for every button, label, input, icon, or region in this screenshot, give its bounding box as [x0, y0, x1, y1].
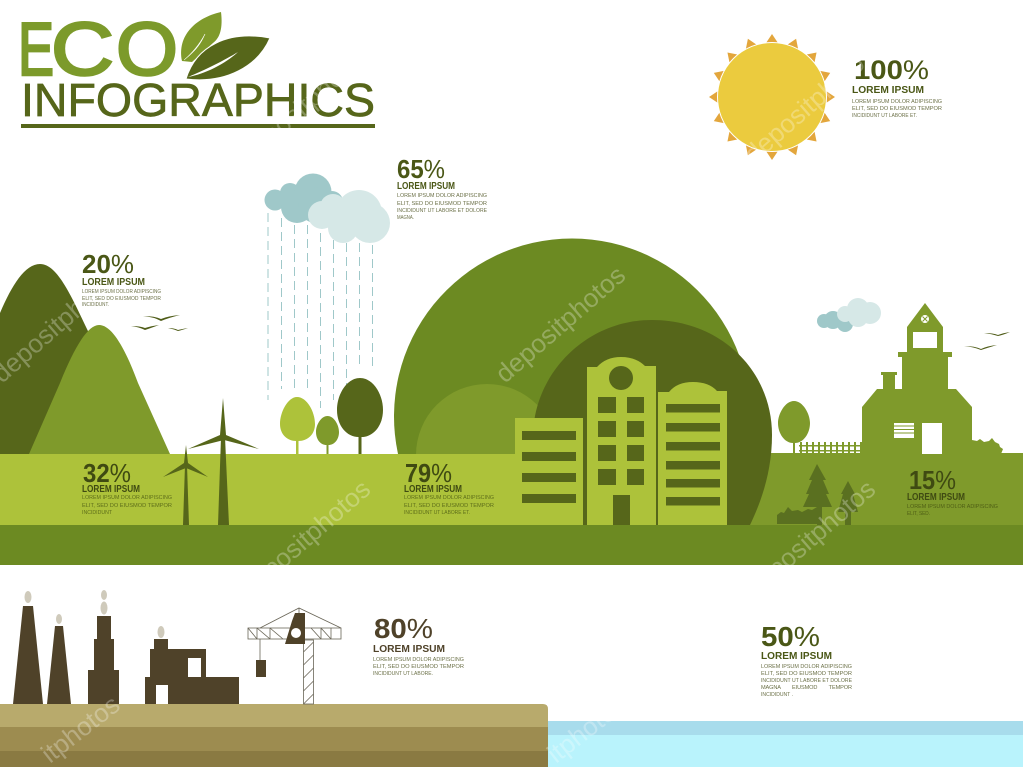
text block: 80%: LOREM IPSUM DOLOR ADIPISCING [373, 657, 464, 663]
text block: 15%: ELIT, SED. [907, 511, 930, 517]
text block: 32%: INCIDIDUNT [82, 510, 113, 516]
text block: 20% [82, 249, 161, 308]
icon: birds right [964, 332, 1010, 350]
icon: bush by house [972, 438, 1003, 454]
icon: small cloud dark [817, 311, 853, 332]
text block: 80%: LOREM IPSUM [373, 643, 445, 655]
icon: factory chimneys [13, 590, 164, 704]
text block: 100% [852, 55, 942, 119]
text block: 50%: LOREM IPSUM DOLOR ADIPISCING [761, 664, 852, 670]
heading: ECO: O [116, 7, 178, 91]
text block: 100%: 100% [854, 55, 929, 85]
icon: right office building [658, 382, 727, 525]
ground: light green band [0, 454, 775, 525]
watermarks: depositphotos [739, 474, 881, 603]
text block: 79%: ELIT, SED DO EIUSMOD TEMPOR [404, 503, 494, 509]
mast [248, 608, 341, 704]
soil layers [0, 704, 548, 767]
title: Eco Infographics [18, 7, 375, 128]
icon: trees in rain [280, 378, 383, 454]
title underline [21, 124, 375, 128]
watermarks: depositphotos [234, 474, 376, 603]
text block: 100%: LOREM IPSUM DOLOR ADIPISCING [852, 99, 942, 105]
text block: 65% [397, 154, 487, 221]
icon: light rain cloud [308, 190, 390, 243]
text block: 100%: LOREM IPSUM [852, 84, 924, 96]
water [540, 721, 1023, 767]
small round hill [416, 384, 558, 455]
icon: house [862, 303, 972, 454]
text block: 79%: LOREM IPSUM [404, 483, 462, 495]
watermarks: itphotos [541, 689, 631, 767]
door [922, 423, 942, 454]
text block: 65%: 65% [397, 154, 445, 184]
watermarks: depositphotos [489, 260, 631, 389]
icon: left office building [515, 418, 583, 525]
text block: 80%: 80% [374, 613, 433, 644]
icon: sun [709, 34, 835, 160]
heading: ECO: C [51, 7, 114, 91]
text block: 32%: ELIT, SED DO EIUSMOD TEMPOR [82, 503, 172, 509]
text block: 32%: LOREM IPSUM DOLOR ADIPISCING [82, 495, 172, 501]
text block: 79%: INCIDIDUNT UT LABORE ET. [404, 510, 470, 516]
text block: 50% [761, 621, 852, 698]
sun rays [709, 34, 835, 160]
icon: right tree and fence [778, 401, 862, 454]
text block: 50%: INCIDIDUNT UT LABORE ET DOLORE [761, 678, 852, 684]
text block: 80%: ELIT, SED DO EIUSMOD TEMPOR [373, 664, 464, 670]
text block: 80%: INCIDIDUNT UT LABORE. [373, 671, 433, 677]
text block: 100%: INCIDIDUNT UT LABORE ET. [852, 113, 917, 119]
heading: ECO: E [18, 7, 54, 91]
text block: 20%: LOREM IPSUM [82, 276, 145, 288]
panel: landscape background hills [0, 238, 750, 455]
text block: 50%: INCIDIDUNT . [761, 692, 793, 698]
text block: 65%: LOREM IPSUM [397, 180, 455, 192]
text block: 20%: ELIT, SED DO EIUSMOD TEMPOR [82, 296, 161, 302]
text block: 20%: LOREM IPSUM DOLOR ADIPISCING [82, 289, 161, 295]
text block: 50%: 50% [761, 621, 820, 652]
tower window [913, 332, 937, 348]
icon: factory building [145, 639, 239, 704]
icon: wind turbines [163, 398, 259, 525]
heading: ECO [18, 7, 178, 91]
text block: 50%: LOREM IPSUM [761, 650, 832, 662]
icon: centre office building [587, 357, 656, 525]
text block: 20%: INCIDIDUNT. [82, 302, 109, 308]
sun disc [718, 42, 826, 152]
round vent [921, 315, 929, 323]
text block: 65%: INCIDIDUNT UT LABORE ET DOLORE [397, 208, 487, 214]
text block: 80% [373, 613, 464, 677]
ground: mid green band [740, 453, 1023, 525]
text block: 65%: ELIT, SED DO EIUSMOD TEMPOR [397, 201, 487, 207]
text block: 65%: MAGNA. [397, 215, 414, 221]
text block: 79% [404, 458, 494, 516]
icon: leaves [181, 12, 270, 80]
text block: 50%: MAGNA EIUSMOD TEMPOR [761, 685, 852, 691]
text block: 79%: LOREM IPSUM DOLOR ADIPISCING [404, 495, 494, 501]
icon: dark rain cloud [264, 174, 343, 223]
icon: rain [268, 213, 372, 408]
light mountain [29, 325, 170, 454]
text block: 32%: LOREM IPSUM [82, 483, 140, 495]
text block: 15% [907, 465, 998, 517]
ground: bottom dark band [0, 525, 1023, 565]
text block: 20%: 20% [82, 249, 134, 279]
watermarks: depositphotos [234, 40, 376, 169]
text block: 32%: 32% [83, 458, 131, 488]
text block: 100%: ELIT, SED DO EIUSMOD TEMPOR [852, 106, 942, 112]
icon: birds left [131, 315, 188, 331]
heading: INFOGRAPHICS: INFOGRAPHICS [21, 74, 375, 126]
text block: 15%: LOREM IPSUM [907, 491, 965, 503]
hanging load [256, 660, 266, 677]
text block: 32% [82, 458, 172, 516]
text block: 15%: 15% [909, 465, 956, 495]
big round hill [394, 238, 750, 454]
text block: 79%: 79% [405, 458, 452, 488]
smoke [24, 590, 164, 638]
chimney [881, 372, 897, 392]
dark mountain [0, 264, 90, 454]
icon: pine trees and bush [777, 464, 858, 525]
counterweight [285, 613, 305, 644]
icon: small cloud light [837, 298, 881, 327]
fence [799, 442, 862, 454]
dark round hill [533, 320, 772, 525]
text block: 15%: LOREM IPSUM DOLOR ADIPISCING [907, 504, 998, 510]
watermarks: depositphotos [738, 40, 880, 169]
text block: 50%: ELIT, SED DO EIUSMOD TEMPOR [761, 671, 852, 677]
louvre window [894, 423, 914, 438]
icon: construction crane [248, 608, 341, 704]
text block: 65%: LOREM IPSUM DOLOR ADIPISCING [397, 193, 487, 199]
watermarks: itphotos [35, 689, 125, 767]
